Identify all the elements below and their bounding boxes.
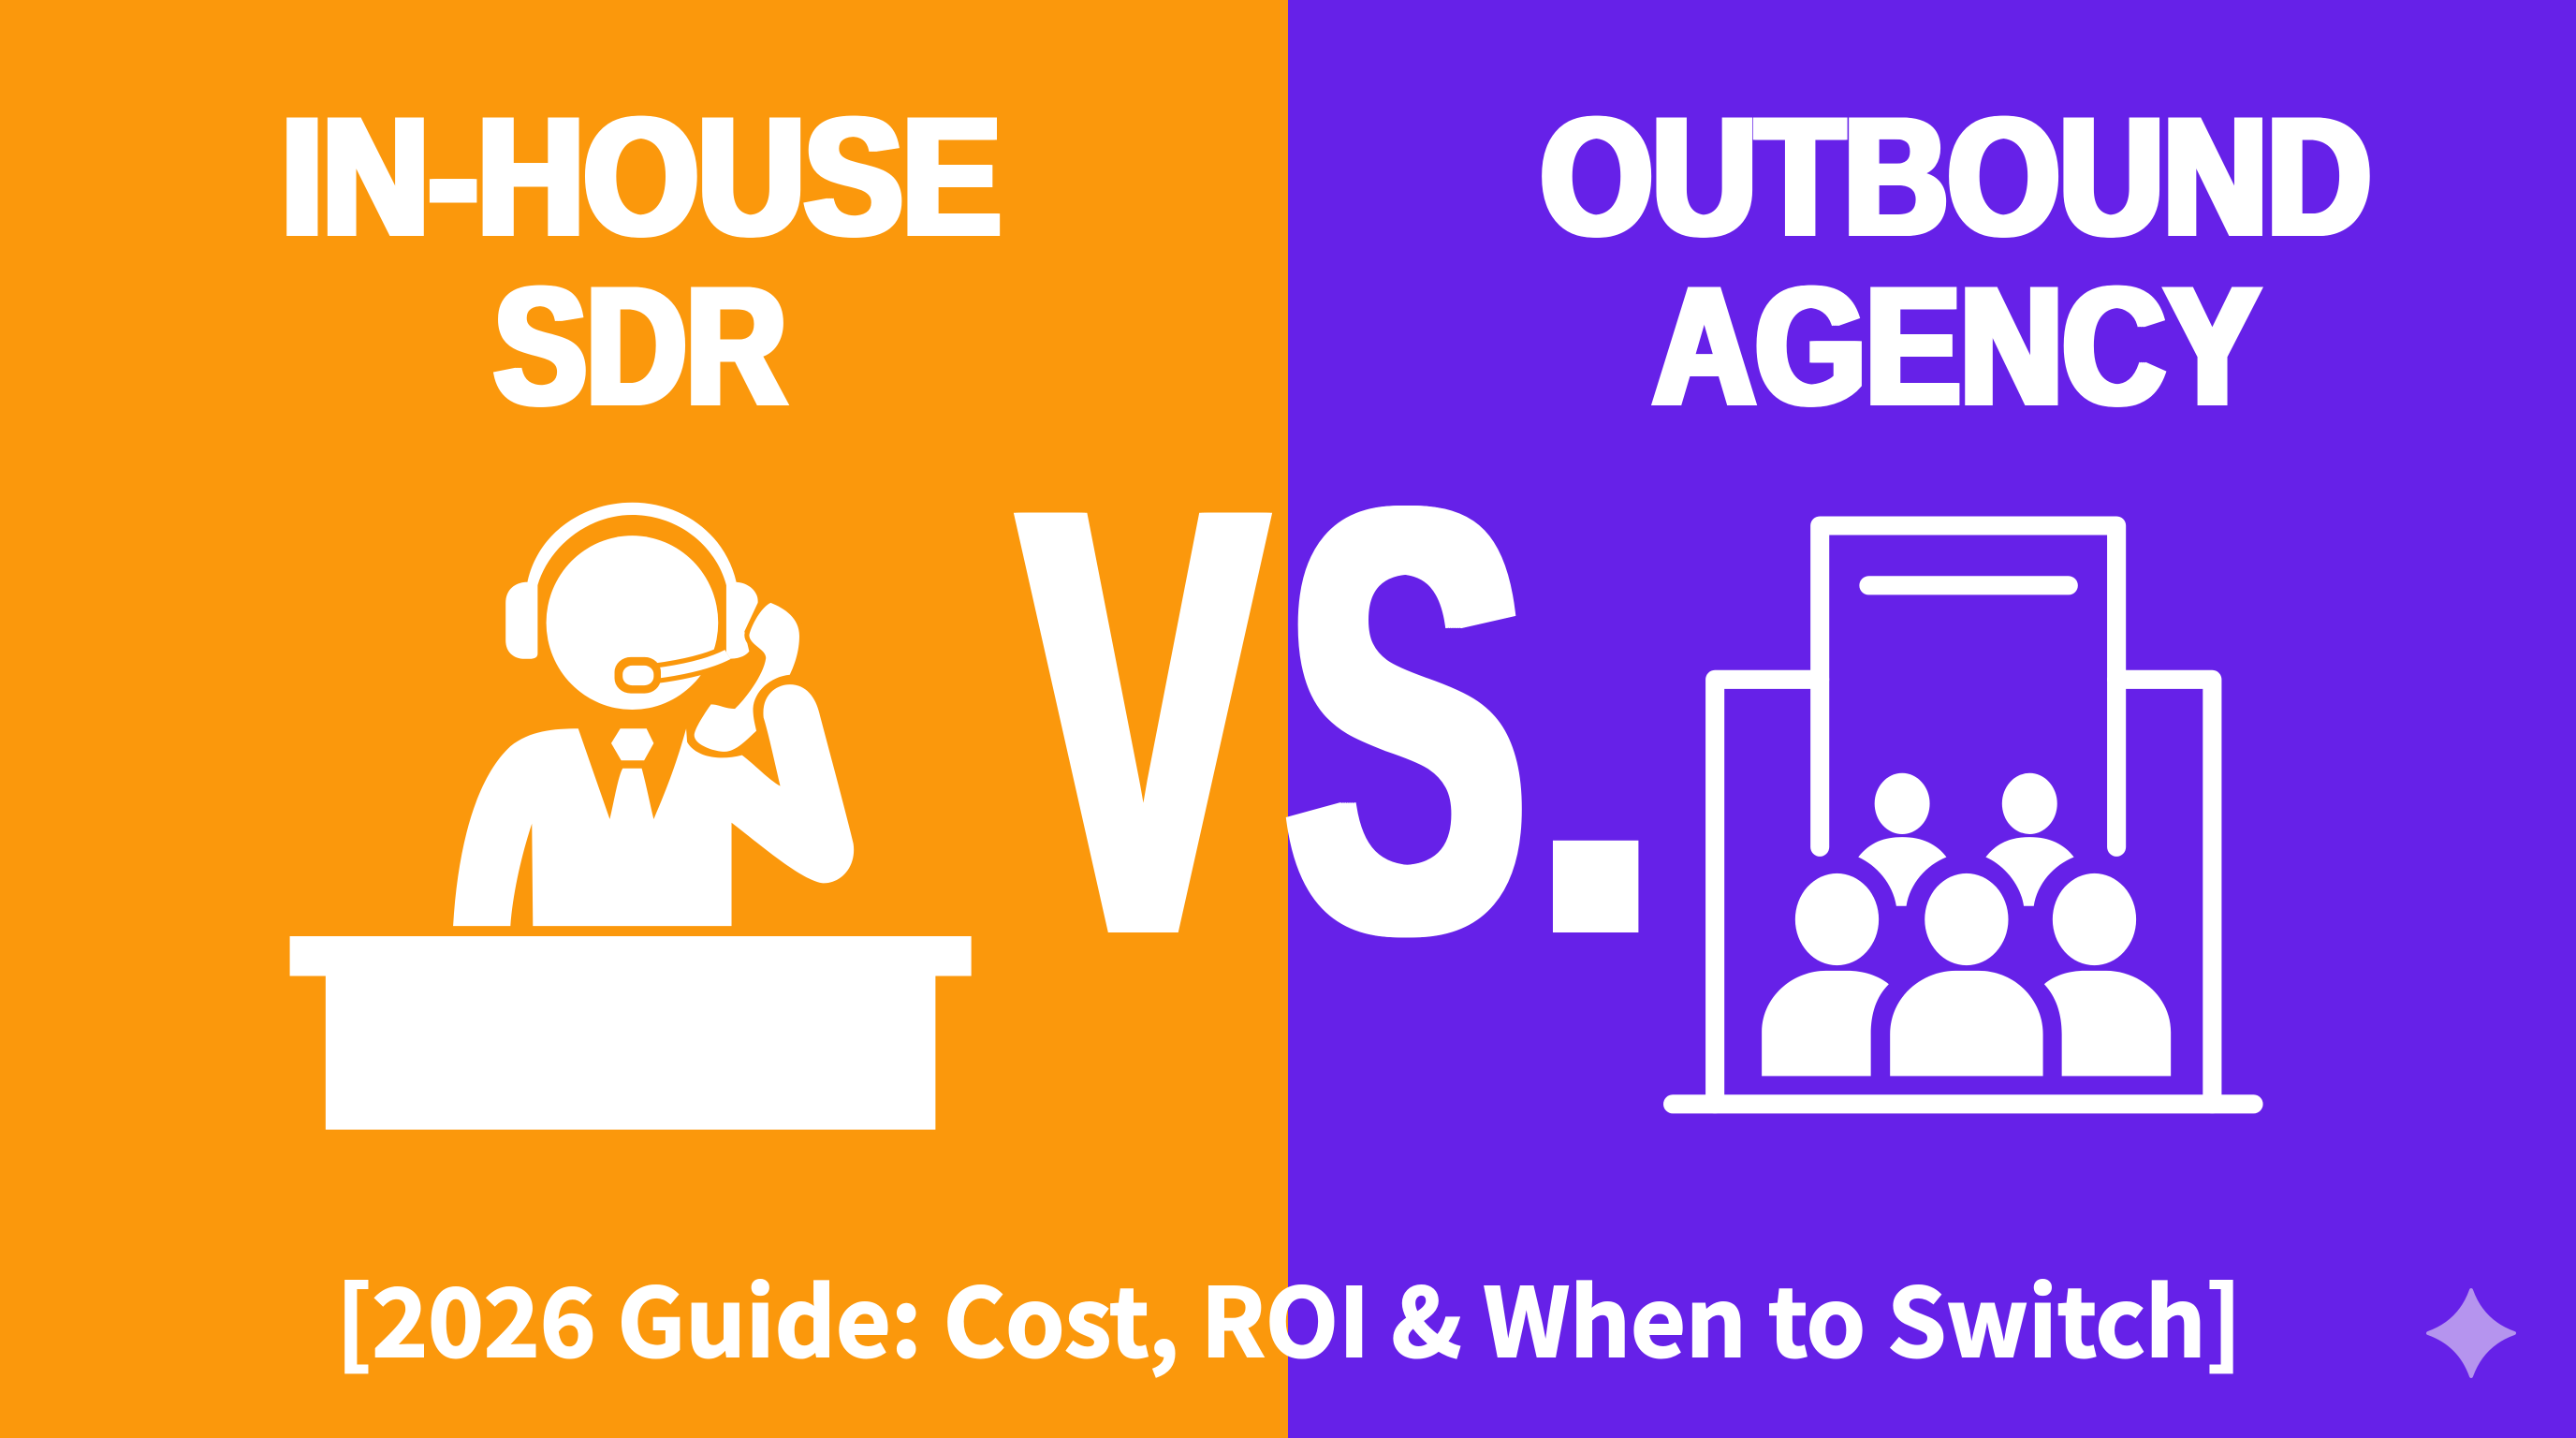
panel: outbound agency purple background (1288, 0, 2576, 1438)
heading: outbound agency: OUTBOUND (1541, 83, 2371, 270)
desk (290, 936, 972, 1130)
icon: sparkle watermark (2428, 1290, 2514, 1376)
head (547, 536, 718, 710)
heading: outbound agency (1541, 83, 2371, 439)
heading: VS.: S (1286, 386, 1526, 1055)
phone handset (695, 603, 799, 752)
microphone boom (644, 654, 727, 675)
panel: in-house orange background (0, 0, 1288, 1438)
heading: outbound agency: AGENCY (1653, 253, 2260, 439)
icon: SDR with headset at desk (290, 503, 972, 1130)
heading: VS.: V (1021, 387, 1266, 1056)
heading: VS. (1021, 374, 1680, 1064)
heading: in-house SDR (282, 83, 1001, 439)
building outline (1673, 526, 2254, 1104)
tie knot (611, 728, 653, 760)
subtitle: [2026 Guide: Cost, ROI & When to Switch] (336, 1248, 2242, 1385)
heading: in-house SDR: IN-HOUSE (282, 83, 1001, 270)
right ear cup (726, 582, 758, 659)
heading: VS.: . (1512, 374, 1680, 1064)
icon: office building with team (1673, 526, 2254, 1104)
heading: in-house SDR: SDR (494, 253, 786, 439)
team of people (1762, 773, 2171, 1076)
left ear cup (505, 582, 537, 659)
microphone capsule (615, 657, 661, 694)
person body (453, 684, 854, 926)
headset band (527, 503, 737, 585)
